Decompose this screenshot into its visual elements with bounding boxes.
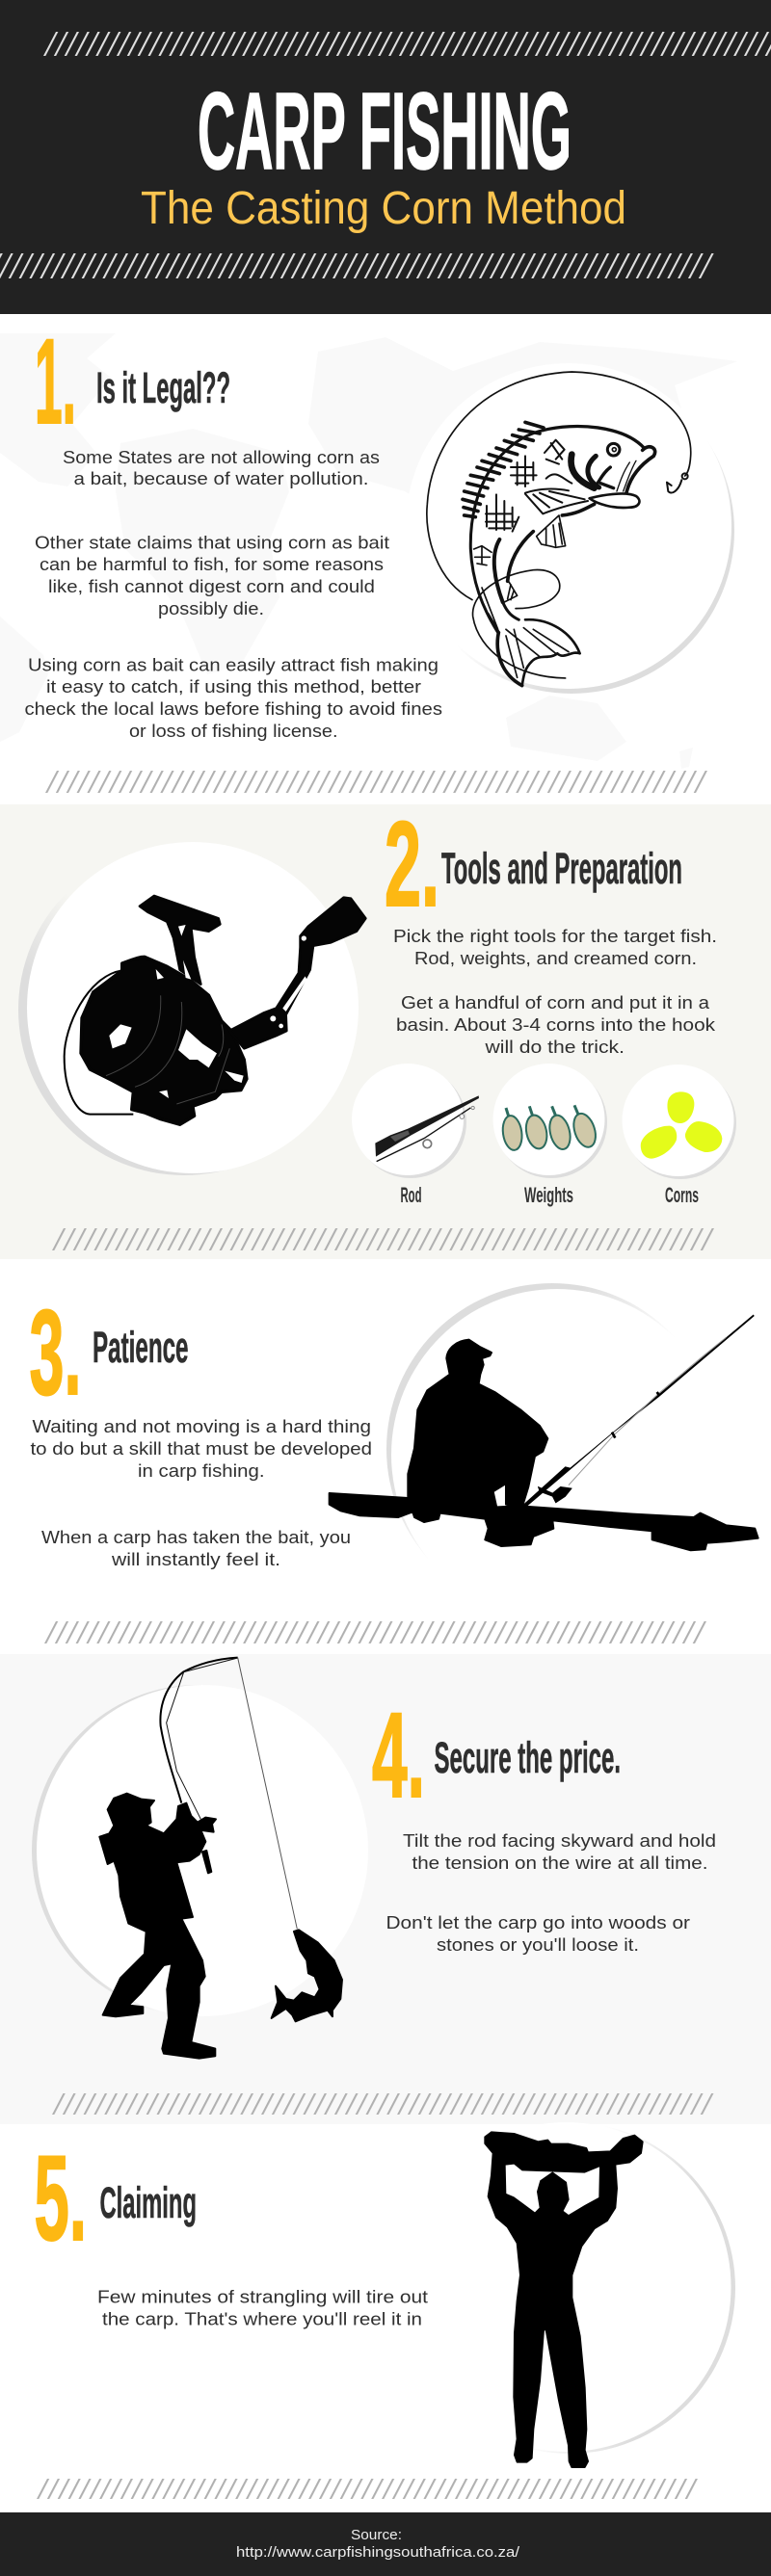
subtitle: The Casting Corn Method (141, 183, 626, 234)
text block: check laws: it easy to catch, if using this method, better (46, 676, 421, 697)
text block: corn: will do the trick. (484, 1037, 625, 1057)
text block: harm claims: possibly die. (158, 598, 264, 618)
icon: angler fighting a fish (99, 1658, 342, 2059)
text block: tools (393, 926, 717, 968)
icon: leaping fish on line (427, 372, 691, 686)
label: Rod (401, 1183, 422, 1207)
text block: harm claims (35, 532, 389, 618)
text block: bite: When a carp has taken the bait, you (41, 1527, 351, 1547)
footer: source: http://www.carpfishingsouthafrica.co.za/ (236, 2544, 520, 2561)
footer: source: Source: (351, 2527, 402, 2543)
text block: bite (41, 1527, 351, 1569)
illustration circle (401, 2122, 735, 2454)
icon: seated angler silhouette (330, 1315, 758, 1550)
heading: Patience (93, 1323, 189, 1372)
panel: tools and preparation (0, 798, 771, 1259)
number 3: 3. (29, 1286, 81, 1420)
illustration circle (406, 363, 734, 694)
item: weights (493, 1064, 607, 1207)
illustration circle (18, 842, 359, 1175)
item: corns (623, 1065, 736, 1207)
icon: man lifting carp silhouette (485, 2132, 643, 2467)
number 5: 5. (35, 2132, 87, 2266)
text block: tire out: Few minutes of strangling will tire out (97, 2287, 428, 2306)
illustration circle (32, 1685, 368, 2016)
panel: claiming (0, 2122, 771, 2512)
panel: patience (0, 1259, 771, 1654)
icon: spinning reel (65, 896, 365, 1124)
label: Weights (524, 1183, 573, 1207)
text block: corn: Get a handful of corn and put it in a (401, 992, 710, 1012)
item: rod (352, 1064, 479, 1207)
text block: woods: stones or you'll loose it. (437, 1934, 639, 1955)
text block: harm claims: can be harmful to fish, for some reasons (40, 554, 384, 574)
number 2: 2. (385, 798, 439, 932)
text block: harm claims: like, fish cannot digest corn and could (48, 576, 375, 596)
footer: source (0, 2512, 771, 2576)
label: Corns (665, 1183, 699, 1207)
text block: tire out (97, 2287, 428, 2329)
panel: is it legal: 1. (35, 315, 76, 449)
text block: tilt: the tension on the wire at all time. (412, 1853, 707, 1873)
world map background (0, 333, 737, 769)
text block: corn: basin. About 3-4 corns into the hook (396, 1014, 716, 1035)
illustration circle (386, 1283, 723, 1620)
panel: is it legal (0, 314, 771, 804)
text block: waiting: Waiting and not moving is a hard thing (33, 1416, 371, 1436)
text block: state rules (63, 447, 380, 488)
text block: tire out: the carp. That's where you'll reel it in (102, 2308, 422, 2329)
text block: state rules: a bait, because of water pollution. (73, 468, 368, 488)
text block: check laws: or loss of fishing license. (129, 721, 337, 741)
text block: waiting: to do but a skill that must be developed (31, 1438, 372, 1459)
text block: waiting (31, 1416, 372, 1481)
text block: corn (396, 992, 716, 1057)
header panel (0, 0, 771, 314)
text block: check laws: check the local laws before fishing to avoid fines (25, 698, 442, 719)
text block: tilt (403, 1830, 716, 1873)
text block: woods: Don't let the carp go into woods or (386, 1912, 690, 1932)
heading: Claiming (100, 2178, 197, 2227)
text block: check laws (25, 655, 442, 741)
text block: check laws: Using corn as bait can easily attract fish making (28, 655, 439, 674)
text block: woods (386, 1912, 690, 1955)
text block: waiting: in carp fishing. (138, 1460, 264, 1481)
text block: tools: Rod, weights, and creamed corn. (414, 948, 697, 968)
panel: secure the price (0, 1654, 771, 2124)
text block: tools: Pick the right tools for the target fish. (393, 926, 717, 946)
text block: state rules: Some States are not allowing corn as (63, 447, 380, 467)
text block: harm claims: Other state claims that using corn as bait (35, 532, 389, 553)
text block: tilt: Tilt the rod facing skyward and hold (403, 1830, 716, 1851)
number 4: 4. (372, 1689, 425, 1823)
text block: bite: will instantly feel it. (111, 1549, 280, 1569)
heading: Is it Legal?? (96, 363, 230, 412)
